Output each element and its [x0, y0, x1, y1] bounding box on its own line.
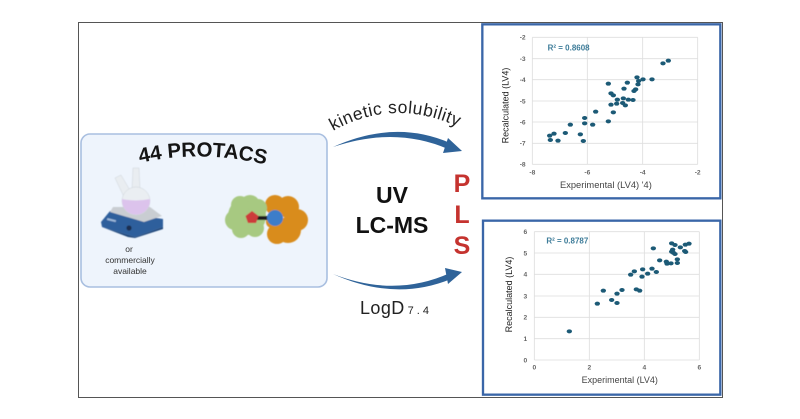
axis tick labels: 5: [523, 250, 527, 257]
axis tick labels: 2: [523, 315, 527, 322]
text: or commercially available: [105, 244, 156, 276]
axis title: y: Recalculated (LV4): [504, 257, 514, 332]
R squared: R² = 0.8608: [548, 43, 590, 52]
text: PLS: [454, 170, 470, 260]
icon: flask on hotplate: [101, 168, 163, 238]
axis tick labels: -4: [640, 170, 646, 177]
outer frame: [78, 22, 722, 398]
axis tick labels: -8: [529, 170, 536, 177]
axis tick labels: 1: [523, 336, 527, 343]
axis tick labels: 0: [523, 357, 527, 364]
axis tick labels: -5: [520, 98, 526, 105]
text: or commercially available: or: [125, 244, 133, 254]
axis tick labels: -8: [520, 162, 526, 169]
axis tick labels: [523, 229, 701, 372]
axis tick labels: 6: [523, 229, 527, 236]
axis tick labels: 6: [697, 365, 701, 372]
arrow: kinetic solubility: [333, 132, 462, 153]
axis tick labels: -2: [520, 35, 526, 42]
label: kinetic solubility: kinetic solubility: [328, 100, 462, 130]
text: or commercially available: commercially: [105, 255, 156, 265]
axis tick labels: -3: [520, 56, 526, 63]
chart: kinetic solubility scatter: [482, 24, 720, 198]
axis tick labels: [520, 35, 701, 177]
panel: 44 PROTACs: [80, 133, 328, 288]
axis tick labels: 3: [523, 293, 527, 300]
heading: 44 PROTACS: 44 PROTACS: [139, 142, 267, 164]
axis tick labels: 4: [642, 365, 646, 372]
axis tick labels: 4: [523, 272, 527, 279]
text: UV LC-MS: UV: [376, 182, 409, 208]
text: UV LC-MS: [356, 182, 428, 238]
axis title: y: Recalculated (LV4): [501, 68, 511, 143]
axis tick labels: -4: [520, 77, 526, 84]
R squared: R² = 0.8787: [546, 237, 589, 246]
axis tick labels: 0: [532, 365, 536, 372]
text: PLS: P: [454, 170, 470, 198]
chart: LogD scatter: [483, 221, 720, 395]
scatter points: [547, 59, 671, 143]
axis tick labels: -6: [520, 119, 526, 126]
label: LogD7.4: LogD 7.4: [360, 298, 432, 318]
axis tick labels: -7: [520, 140, 526, 147]
axis tick labels: 2: [587, 365, 591, 372]
text: PLS: S: [454, 232, 470, 260]
text: or commercially available: available: [113, 266, 147, 276]
scatter points: [567, 241, 692, 333]
axis title: x: Experimental (LV4) '4): [560, 180, 652, 190]
icon: PROTAC ternary complex: [225, 195, 308, 244]
axis tick labels: -6: [584, 170, 591, 177]
arrow: LogD: [333, 268, 462, 289]
text: PLS: L: [454, 201, 470, 229]
axis tick labels: -2: [695, 170, 701, 177]
axis title: x: Experimental (LV4): [582, 375, 658, 385]
text: UV LC-MS: LC-MS: [356, 212, 428, 238]
